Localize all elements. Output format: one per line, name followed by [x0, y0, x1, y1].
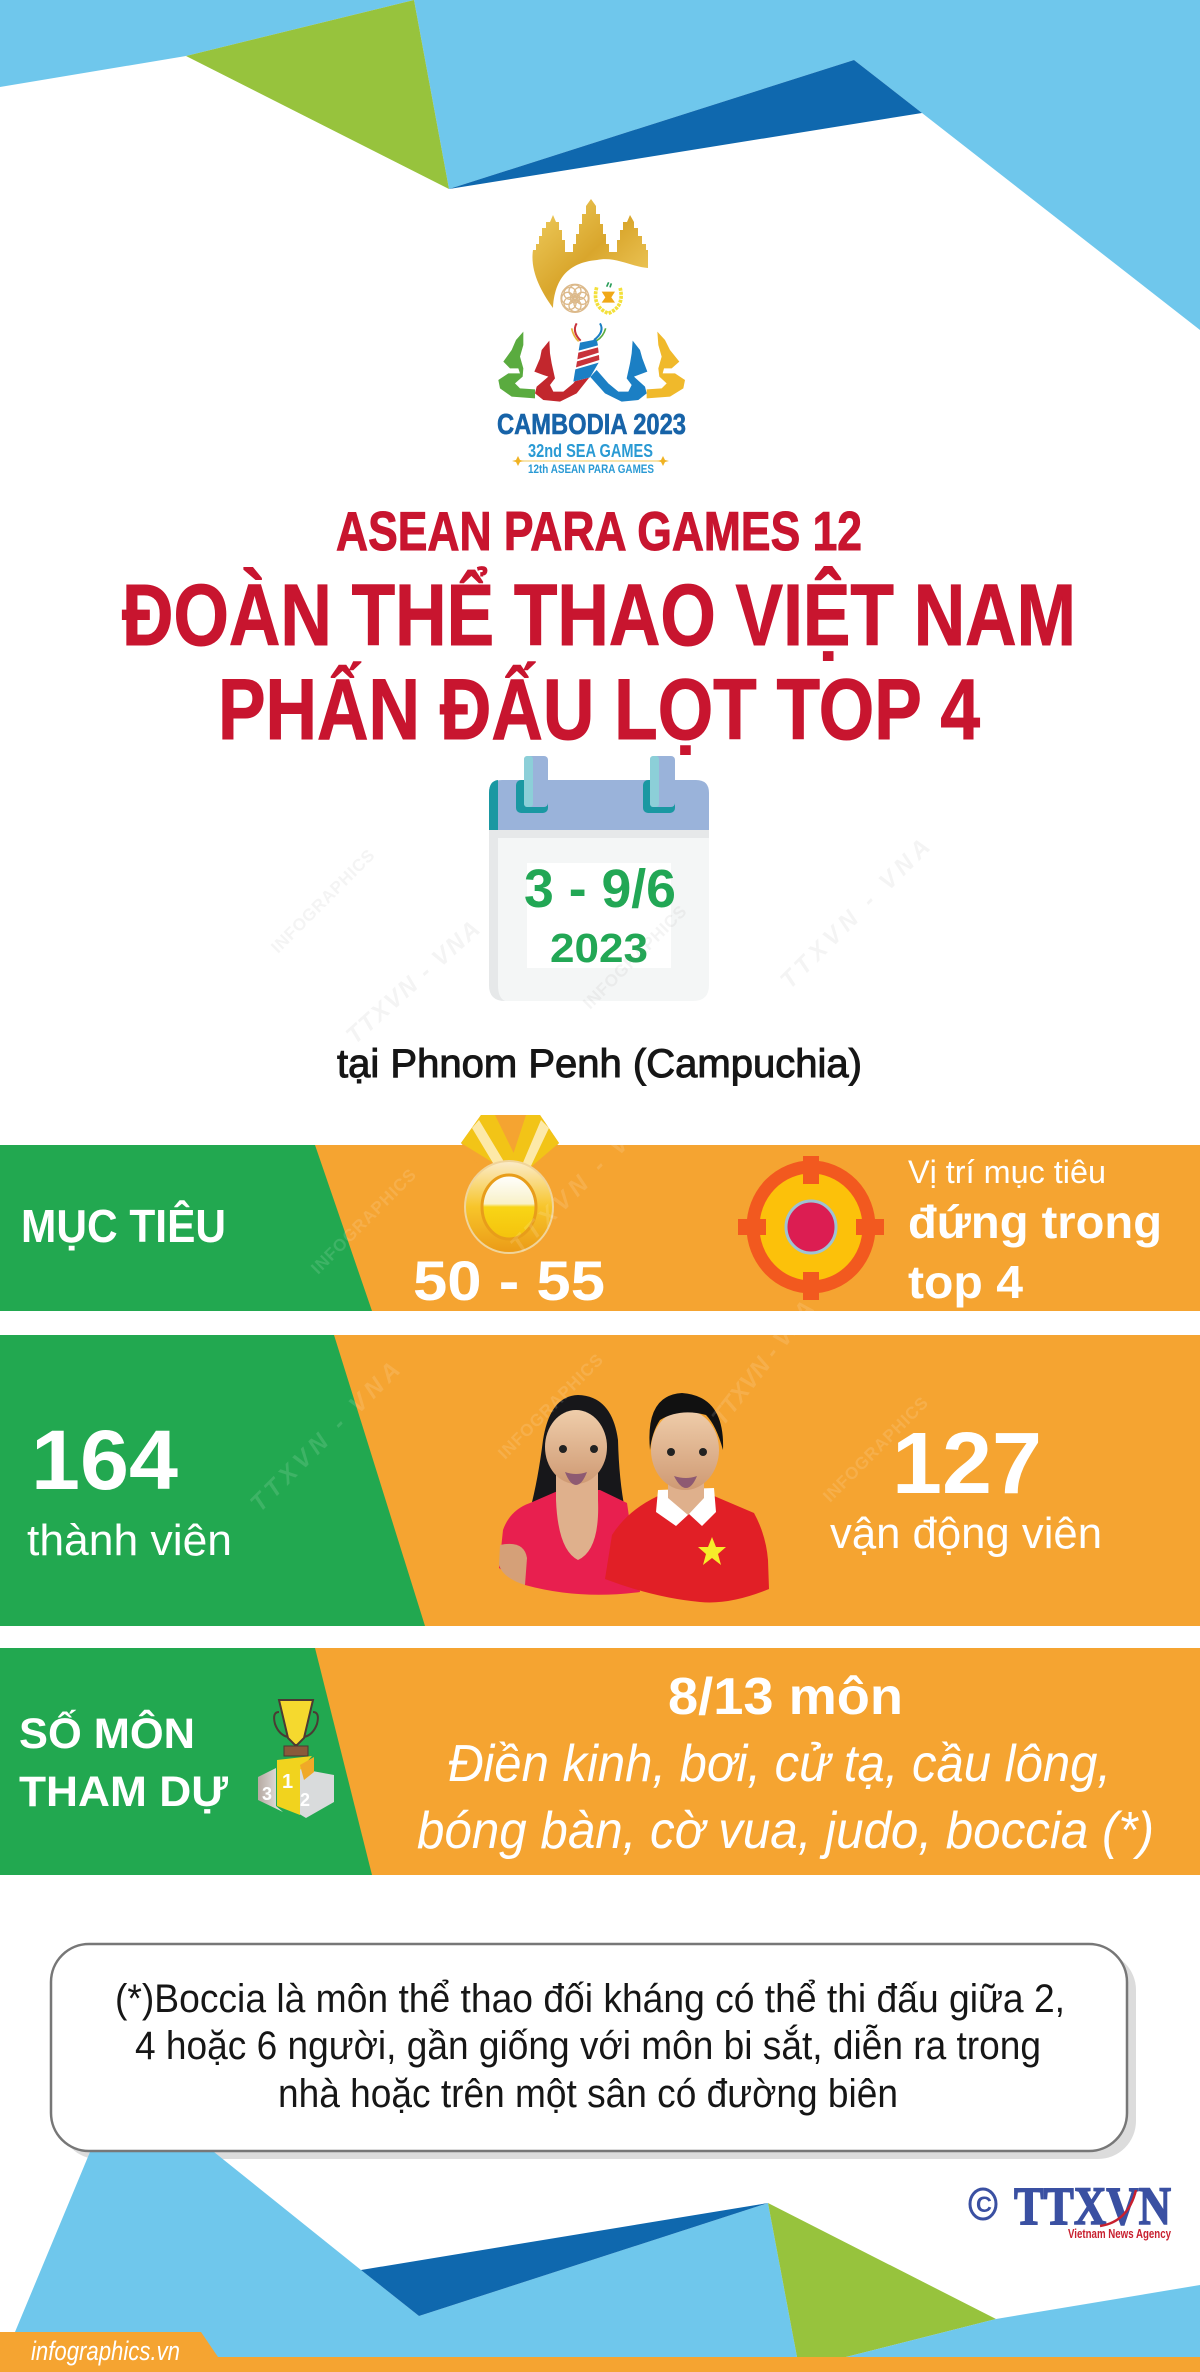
- target text: top 4: [908, 1256, 1023, 1308]
- icon: trophy on podium: 3: [262, 1784, 272, 1804]
- icon: target: [738, 1156, 884, 1300]
- note text: (*)Boccia là môn thể thao đối kháng có thể thi đấu giữa 2,: [115, 1977, 1065, 2021]
- location text: tại Phnom Penh (Campuchia): [337, 1042, 862, 1086]
- date text: [524, 859, 676, 971]
- icon: twisted central pole: [572, 323, 606, 382]
- icon: lotus emblem: [561, 284, 589, 312]
- watermarks: [245, 834, 936, 1517]
- note text: nhà hoặc trên một sân có đường biên: [278, 2072, 898, 2116]
- stat: athletes: vận động viên: [830, 1509, 1102, 1558]
- stat: athletes: 127: [892, 1415, 1042, 1512]
- icon: nagas and emblems: [498, 282, 685, 402]
- icon: golden temple crown: [532, 199, 648, 308]
- icon: ASEAN para emblem: [596, 282, 621, 313]
- target text: Vị trí mục tiêu: [908, 1154, 1106, 1190]
- note text: 4 hoặc 6 người, gần giống với môn bi sắt, diễn ra trong: [135, 2023, 1041, 2068]
- footer bar with site name: [0, 2332, 1200, 2372]
- watermarks: INFOGRAPHICS: [307, 1165, 420, 1278]
- icon: red naga: [534, 341, 590, 402]
- icon: trophy on podium: 1: [282, 1771, 293, 1793]
- callout shadow: [60, 1952, 1136, 2159]
- stat: members: thành viên: [27, 1516, 232, 1565]
- heading: goal: MỤC TIÊU: [21, 1200, 226, 1252]
- logo text: CAMBODIA 2023: [497, 409, 686, 441]
- icon: trophy on podium: 2: [300, 1790, 310, 1810]
- medal count: 50 - 55: [413, 1249, 605, 1312]
- logo: Cambodia 2023 SEA Games: 32nd SEA GAMES: [528, 441, 653, 461]
- icon: blue naga: [590, 341, 647, 402]
- title: ASEAN PARA GAMES 12: [336, 500, 862, 562]
- watermarks: TTXVN - VNA: [341, 916, 485, 1049]
- sports list: Điền kinh, bơi, cử tạ, cầu lông,: [448, 1735, 1111, 1793]
- heading: number of sports: THAM DỰ: [19, 1768, 228, 1816]
- watermarks: INFOGRAPHICS: [267, 846, 378, 957]
- panel: delegation row: [0, 1335, 1200, 1626]
- watermarks: TTXVN - VNA: [775, 834, 936, 994]
- icon: gold medal: [461, 1115, 559, 1253]
- watermarks: TTXVN - VNA: [245, 1357, 406, 1517]
- icon: calendar with dates: [489, 756, 709, 1001]
- target text: [908, 1154, 1162, 1308]
- watermarks: TTXVN - VNA: [505, 1099, 666, 1259]
- logo: Cambodia 2023 SEA Games: [497, 199, 686, 476]
- title: PHẤN ĐẤU LỌT TOP 4: [218, 662, 980, 758]
- sports list: [417, 1735, 1154, 1860]
- logo: TTXVN copyright: C: [976, 2192, 992, 2217]
- watermarks: TTXVN - VNA: [706, 1296, 820, 1431]
- stat: athletes: [830, 1415, 1102, 1558]
- icon: woman athlete: [499, 1395, 640, 1595]
- date text: 3 - 9/6: [524, 859, 676, 919]
- date text: 2023: [550, 925, 648, 971]
- footer bar with site name: infographics.vn: [31, 2336, 180, 2366]
- callout: boccia note: [51, 1944, 1127, 2151]
- watermarks: INFOGRAPHICS: [579, 902, 690, 1013]
- stat: members: 164: [31, 1413, 178, 1507]
- icon: trophy on podium: [258, 1700, 334, 1818]
- sports count: 8/13 môn: [668, 1668, 903, 1726]
- panel: sports row: [0, 1648, 1200, 1875]
- icon: green naga: [498, 332, 535, 398]
- logo: TTXVN copyright: [970, 2176, 1172, 2241]
- target text: đứng trong: [908, 1196, 1162, 1248]
- heading: number of sports: SỐ MÔN: [19, 1709, 195, 1758]
- top decorative shapes: [0, 0, 1200, 330]
- logo: TTXVN copyright: TTXVN: [1014, 2176, 1171, 2236]
- icon: man athlete: [605, 1393, 769, 1602]
- heading: number of sports: [19, 1709, 228, 1816]
- panel: goal row: [0, 1115, 1200, 1312]
- title: [122, 500, 1076, 758]
- bottom decorative shapes: [15, 2152, 1200, 2357]
- note text: [115, 1977, 1065, 2116]
- sports list: bóng bàn, cờ vua, judo, boccia (*): [417, 1802, 1154, 1860]
- icon: yellow naga: [647, 332, 685, 398]
- stat: members: [27, 1413, 232, 1565]
- watermarks: INFOGRAPHICS: [494, 1350, 607, 1463]
- logo: Cambodia 2023 SEA Games: 12th ASEAN PARA GAMES: [528, 464, 654, 476]
- watermarks: INFOGRAPHICS: [819, 1393, 932, 1506]
